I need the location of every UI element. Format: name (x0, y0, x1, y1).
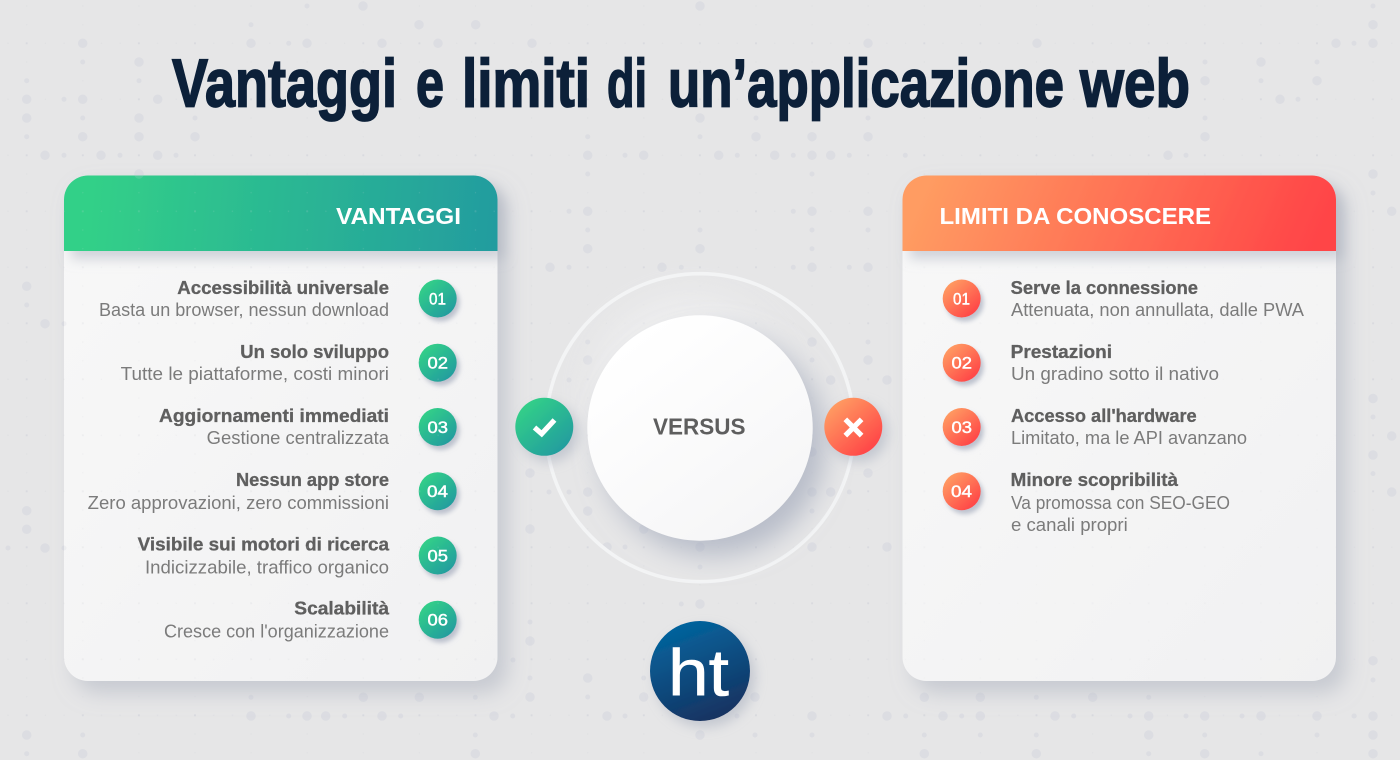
limit 04: Minore scopribilità (1011, 470, 1179, 490)
limit 04: Va promossa con SEO-GEO (1011, 493, 1230, 513)
title: un’applicazione (668, 46, 1064, 122)
limit 01: Serve la connessione (1011, 278, 1198, 298)
limit 03: Limitato, ma le API avanzano (1011, 428, 1247, 448)
icon: check (515, 398, 573, 456)
item 04: Zero approvazioni, zero commissioni (88, 493, 389, 513)
item 01: Basta un browser, nessun download (99, 300, 389, 320)
title (172, 46, 1190, 122)
item 01: Accessibilità universale (177, 278, 389, 298)
panel: limiti da conoscere (64, 176, 1353, 700)
outer ring (546, 274, 854, 582)
title: limiti (462, 46, 590, 122)
panel header: vantaggi: VANTAGGI (336, 203, 461, 229)
item 03: 03 (428, 418, 448, 437)
item 01: 01 (429, 290, 446, 308)
item 02: Un solo sviluppo (240, 342, 389, 362)
limit 02: Un gradino sotto il nativo (1011, 364, 1219, 384)
limit 02: 02 (952, 354, 972, 373)
item 04: 04 (427, 482, 448, 501)
icon: cross (824, 398, 882, 456)
limit 03: Accesso all'hardware (1011, 406, 1197, 426)
item 05: Indicizzabile, traffico organico (145, 557, 389, 577)
limit 04: 04 (951, 482, 972, 501)
item 06: Cresce con l'organizzazione (164, 621, 389, 641)
title: Vantaggi (172, 46, 397, 122)
item 04: Nessun app store (236, 470, 389, 490)
item 05: 05 (428, 546, 448, 566)
limit 03: 03 (952, 418, 972, 437)
item 02 (121, 342, 457, 384)
limit 02: Prestazioni (1011, 342, 1112, 362)
item 04 (88, 470, 457, 513)
item 06: 06 (428, 611, 448, 630)
panel header: limiti: LIMITI DA CONOSCERE (940, 203, 1211, 229)
logo: ht: ht (668, 636, 729, 710)
central circle with label: VERSUS (653, 413, 746, 439)
item 02: 02 (428, 354, 448, 373)
limit 03 (943, 406, 1247, 448)
panel header: limiti (902, 176, 1336, 251)
item 03: Gestione centralizzata (207, 428, 390, 448)
title: e (416, 46, 444, 122)
logo: ht (650, 621, 750, 721)
item 06: Scalabilità (294, 599, 390, 619)
item 06 (164, 599, 457, 641)
item 03 (159, 406, 457, 448)
item 01 (99, 278, 457, 320)
limit 04: e canali propri (1011, 515, 1128, 535)
limit 01: Attenuata, non annullata, dalle PWA (1011, 300, 1304, 320)
title: di (607, 46, 647, 122)
limit 02 (943, 342, 1219, 384)
panel: vantaggi (64, 176, 514, 700)
panel header: vantaggi (64, 176, 498, 251)
item 02: Tutte le piattaforme, costi minori (121, 364, 389, 384)
limit 01: 01 (953, 290, 970, 308)
versus graphic (515, 274, 882, 582)
item 05: Visibile sui motori di ricerca (138, 535, 390, 555)
limit 01 (943, 278, 1304, 320)
title: web (1079, 46, 1190, 122)
central circle with label (587, 315, 813, 541)
item 03: Aggiornamenti immediati (159, 406, 389, 426)
limit 04 (943, 470, 1230, 535)
item 05 (138, 535, 457, 577)
